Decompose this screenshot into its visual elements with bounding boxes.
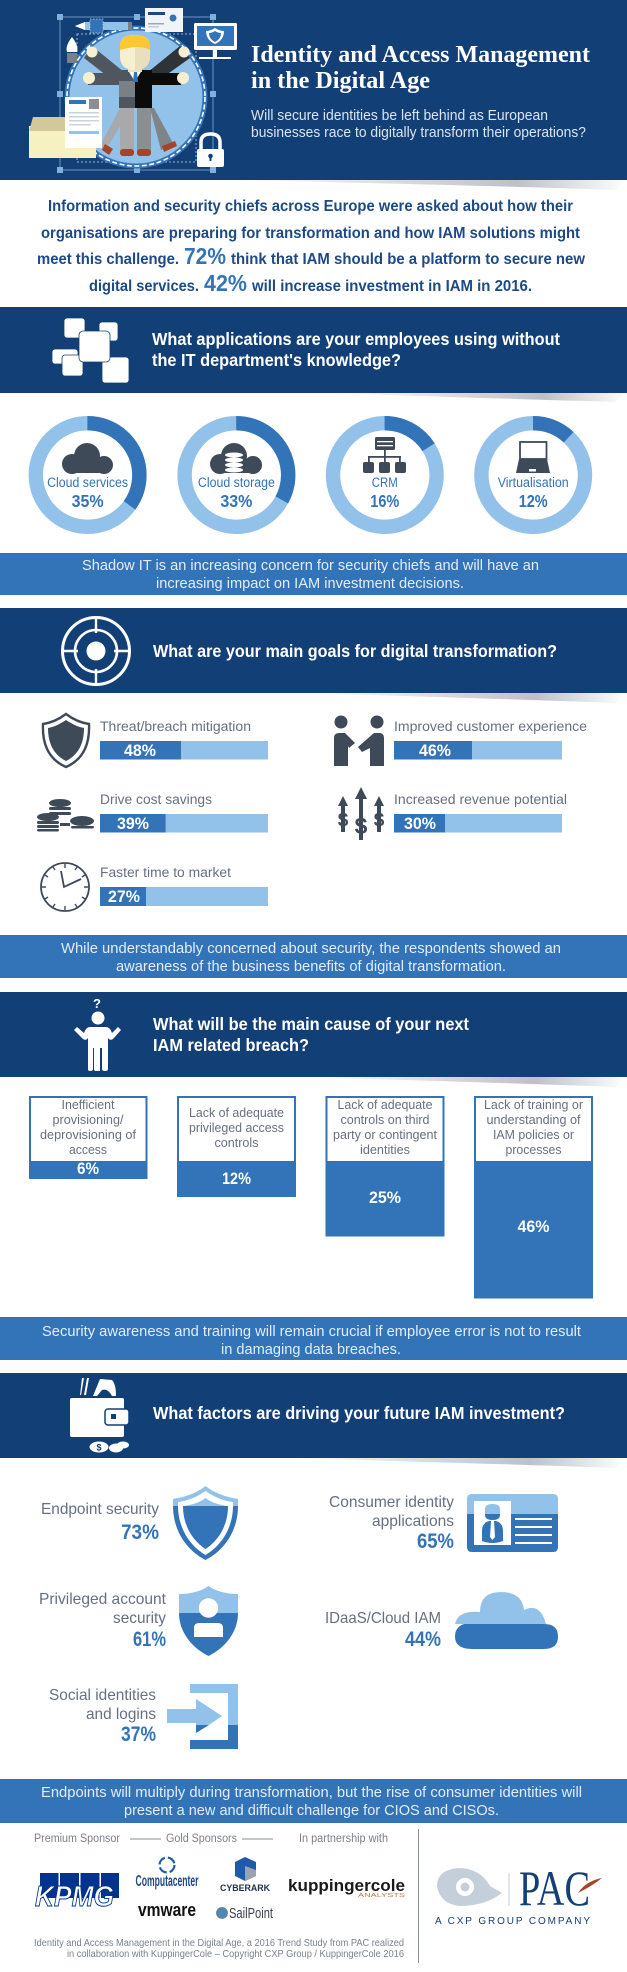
factor: privileged account security 61% — [39, 1586, 238, 1656]
goal: faster time to market 27% — [41, 863, 268, 911]
logo: KuppingerCole: kuppingercole — [288, 1876, 405, 1895]
icon: clock — [41, 863, 89, 911]
subtitle: businesses race to digitally transform their operations? — [251, 125, 586, 141]
icon: rising dollars: $ — [374, 810, 385, 831]
column: inefficient provisioning 6%: deprovisioning of — [40, 1127, 136, 1142]
icon: wallet — [70, 1378, 129, 1452]
heading: What will be the main cause of your next — [153, 1014, 469, 1034]
factor: social identities and logins 37%: Social identities — [49, 1687, 156, 1704]
sponsor headings: Premium Sponsor — [34, 1833, 120, 1845]
intro text block: will increase investment in IAM in 2016. — [251, 278, 532, 295]
factor: IDaaS/Cloud IAM 44%: 44% — [405, 1628, 441, 1651]
donut: virtualisation 12%: Virtualisation — [498, 475, 569, 490]
icon: laptop — [516, 442, 550, 473]
logo: CyberArk: CYBERARK — [220, 1883, 270, 1894]
icon: shrugging person: ? — [93, 996, 101, 1011]
goal: increased revenue potential 30%: Increased revenue potential — [394, 792, 567, 807]
column: third party identities 25%: 25% — [369, 1189, 401, 1207]
logo: Computacenter — [136, 1858, 198, 1890]
copyright note: in collaboration with KuppingerCole – Copyright CXP Group / KuppingerCole 2016 — [67, 1949, 404, 1960]
column: inefficient provisioning 6%: Inefficient — [62, 1097, 115, 1112]
section banner: breach cause — [0, 992, 627, 1087]
factor: privileged account security 61%: 61% — [133, 1628, 166, 1651]
intro text block: organisations are preparing for transformation and how IAM solutions might — [41, 225, 581, 242]
callout: endpoints and consumer identities: present a new and difficult challenge for CIOS and CISOs. — [124, 1802, 499, 1819]
factor: social identities and logins 37%: and logins — [86, 1706, 156, 1723]
goal: increased revenue potential 30%: 30% — [404, 815, 436, 833]
factor: social identities and logins 37%: 37% — [121, 1723, 156, 1746]
column: lack of training 46%: 46% — [518, 1218, 550, 1236]
callout: security awareness — [0, 1317, 627, 1360]
donut: cloud services 35%: 35% — [72, 491, 104, 511]
subtitle: Will secure identities be left behind as European — [251, 108, 548, 124]
logo: PAC — [435, 1860, 602, 1927]
icon: org chart — [363, 437, 406, 473]
title: in the Digital Age — [251, 67, 430, 94]
icon: login arrow — [167, 1684, 238, 1749]
icon: rising dollars: $ — [338, 810, 349, 831]
factor: social identities and logins 37% — [49, 1684, 238, 1749]
icon: rising dollars: $ — [355, 813, 368, 839]
icon: cloud storage — [210, 443, 262, 474]
goal: increased revenue potential 30% — [338, 787, 567, 840]
intro text block: think that IAM should be a platform to secure new — [231, 251, 586, 268]
callout: business benefits — [0, 935, 627, 978]
sponsor headings: Gold Sponsors — [166, 1833, 237, 1845]
column: inefficient provisioning 6%: access — [69, 1142, 107, 1157]
column: lack of training 46%: IAM policies or — [493, 1127, 575, 1142]
header banner — [0, 0, 627, 190]
column: privileged access controls 12%: privileged access — [189, 1120, 284, 1135]
icon: scattered app tiles — [52, 318, 129, 383]
column: lack of training 46%: understanding of — [486, 1112, 581, 1127]
callout: security awareness: Security awareness and training will remain crucial if employee error is not to result — [42, 1323, 582, 1340]
icon: cloud — [455, 1592, 558, 1649]
intro text block — [37, 198, 586, 296]
section banner: goals — [0, 608, 627, 703]
logo: Computacenter: Computacenter — [136, 1873, 198, 1890]
donut: virtualisation 12% — [481, 423, 585, 527]
goal: faster time to market 27%: Faster time to market — [100, 865, 231, 880]
logo: PAC: PAC — [519, 1860, 590, 1916]
donut: CRM 16% — [333, 423, 437, 527]
factor: endpoint security 73%: 73% — [121, 1521, 159, 1544]
icon: person shield — [179, 1586, 238, 1656]
callout: endpoints and consumer identities — [0, 1779, 627, 1823]
donut: cloud services 35%: Cloud services — [47, 475, 128, 490]
factor: privileged account security 61%: security — [113, 1610, 166, 1627]
factor: consumer identity applications 65%: 65% — [417, 1530, 454, 1553]
logo: SailPoint: SailPoint — [229, 1905, 274, 1922]
column: third party identities 25%: party or contingent — [333, 1127, 437, 1142]
factor: consumer identity applications 65%: applications — [372, 1513, 454, 1530]
logo: KuppingerCole: ANALYSTS — [358, 1893, 406, 1899]
goal: threat/breach mitigation 48% — [43, 714, 268, 767]
goal: improved customer experience 46%: 46% — [419, 742, 451, 760]
copyright note — [34, 1938, 404, 1960]
goal: threat/breach mitigation 48%: 48% — [124, 742, 156, 760]
icon: shield — [173, 1486, 238, 1560]
icon: wallet: $ — [96, 1442, 102, 1452]
illustration: digital identity figure — [29, 8, 237, 173]
donut: cloud storage 33%: Cloud storage — [198, 475, 275, 490]
icon: id card — [467, 1494, 558, 1552]
logo: CyberArk — [220, 1857, 270, 1894]
factor: consumer identity applications 65%: Consumer identity — [329, 1494, 454, 1511]
column: lack of training 46%: Lack of training or — [484, 1097, 584, 1112]
goal: drive cost savings 39%: 39% — [117, 815, 149, 833]
goal: improved customer experience 46%: Improved customer experience — [394, 719, 587, 734]
heading — [153, 1014, 469, 1055]
column: third party identities 25% — [326, 1096, 444, 1236]
intro text block: 72% — [184, 243, 226, 269]
goal: faster time to market 27%: 27% — [108, 888, 140, 906]
logo: PAC: A CXP GROUP COMPANY — [435, 1916, 590, 1927]
column: privileged access controls 12%: controls — [214, 1135, 259, 1150]
logo: KPMG: KPMG — [35, 1881, 114, 1913]
title: Identity and Access Management — [251, 41, 591, 68]
heading: What are your main goals for digital transformation? — [153, 641, 557, 661]
heading: What applications are your employees using without — [152, 329, 560, 349]
column: privileged access controls 12%: 12% — [222, 1170, 251, 1188]
donut: cloud storage 33% — [185, 423, 288, 527]
factor: IDaaS/Cloud IAM 44%: IDaaS/Cloud IAM — [325, 1610, 441, 1627]
section banner: investment factors — [0, 1373, 627, 1468]
donut: cloud storage 33%: 33% — [220, 491, 253, 511]
copyright note: Identity and Access Management in the Digital Age, a 2016 Trend Study from PAC realized — [34, 1938, 404, 1949]
column: inefficient provisioning 6%: 6% — [77, 1160, 99, 1178]
factor: endpoint security 73%: Endpoint security — [41, 1501, 159, 1518]
callout: shadow IT — [0, 553, 627, 595]
logo: SailPoint — [216, 1905, 274, 1922]
heading — [152, 329, 560, 370]
donut: virtualisation 12%: 12% — [519, 491, 548, 511]
goal: threat/breach mitigation 48%: Threat/breach mitigation — [100, 719, 251, 734]
heading: IAM related breach? — [153, 1035, 309, 1055]
column: privileged access controls 12% — [178, 1096, 296, 1196]
donut: CRM 16%: CRM — [372, 475, 398, 490]
icon: coins — [37, 799, 94, 832]
icon: cloud — [62, 443, 113, 474]
factor: IDaaS/Cloud IAM 44% — [325, 1592, 558, 1651]
heading: What factors are driving your future IAM investment? — [153, 1403, 565, 1423]
column: lack of training 46% — [474, 1096, 592, 1298]
callout: shadow IT: Shadow IT is an increasing concern for security chiefs and will have an — [82, 557, 539, 574]
intro text block: digital services. — [89, 278, 199, 295]
column: third party identities 25%: identities — [360, 1142, 410, 1157]
column: privileged access controls 12%: Lack of adequate — [189, 1105, 284, 1120]
heading: the IT department's knowledge? — [152, 350, 401, 370]
goal: drive cost savings 39%: Drive cost savings — [100, 792, 212, 807]
donut: cloud services 35% — [36, 423, 139, 527]
title — [251, 41, 591, 94]
icon: shield — [43, 714, 89, 767]
section banner: applications — [0, 307, 627, 402]
intro text block: 42% — [204, 270, 247, 296]
sponsor headings: In partnership with — [299, 1833, 388, 1845]
factor: privileged account security 61%: Privileged account — [39, 1591, 167, 1608]
icon: target — [62, 617, 130, 685]
sponsor headings — [34, 1833, 388, 1845]
callout: business benefits: awareness of the business benefits of digital transformation. — [116, 958, 506, 975]
factor: endpoint security 73% — [41, 1486, 238, 1560]
intro text block: meet this challenge. — [37, 251, 179, 268]
goal: drive cost savings 39% — [37, 792, 268, 833]
column: third party identities 25%: controls on third — [340, 1112, 430, 1127]
column: inefficient provisioning 6% — [30, 1096, 147, 1178]
goal: improved customer experience 46% — [334, 716, 587, 766]
column: lack of training 46%: processes — [506, 1142, 562, 1157]
column: third party identities 25%: Lack of adequate — [338, 1097, 432, 1112]
icon: rising dollars — [338, 787, 385, 840]
callout: business benefits: While understandably concerned about security, the respondents showed an — [61, 940, 561, 957]
logo: VMware: vmware — [138, 1900, 196, 1920]
callout: endpoints and consumer identities: Endpoints will multiply during transformation, but the rise of consumer identities will — [41, 1784, 582, 1801]
subtitle — [251, 108, 586, 141]
callout: shadow IT: increasing impact on IAM investment decisions. — [156, 575, 464, 592]
donut: CRM 16%: 16% — [370, 491, 400, 511]
factor: consumer identity applications 65% — [329, 1494, 558, 1553]
callout: security awareness: in damaging data breaches. — [221, 1341, 401, 1358]
column: inefficient provisioning 6%: provisioning/ — [52, 1112, 124, 1127]
icon: shrugging person — [74, 996, 121, 1071]
intro text block: Information and security chiefs across Europe were asked about how their — [48, 198, 573, 215]
icon: handshake — [334, 716, 384, 766]
